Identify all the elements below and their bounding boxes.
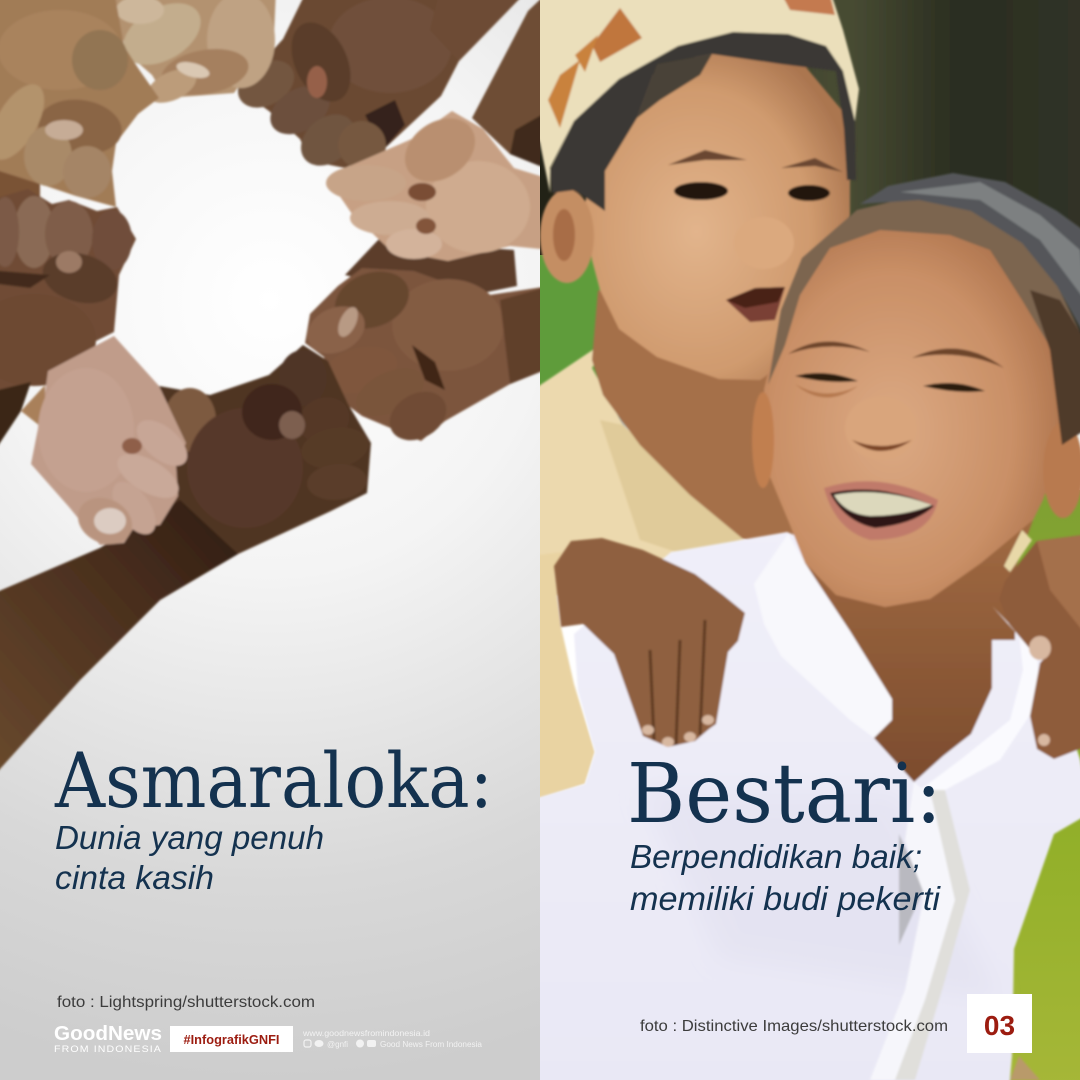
social links: www.goodnewsfromindonesia.id: [302, 1029, 430, 1038]
photo credit left: foto : Lightspring/shutterstock.com: [57, 994, 315, 1011]
photo background: green grass right: [1000, 490, 1080, 1080]
ear left: [752, 392, 774, 488]
fist: lower light: [21, 336, 195, 553]
nose: [778, 225, 793, 264]
logo: GoodNews from Indonesia: FROM INDONESIA: [54, 1044, 162, 1055]
subtitle: Asmaraloka: cinta kasih: [55, 859, 214, 896]
gray gap: [899, 834, 923, 945]
cap: [860, 173, 1080, 345]
title: Bestari: Bestari:: [627, 747, 942, 842]
logo: GoodNews from Indonesia: [54, 1023, 162, 1055]
ear: [540, 189, 594, 283]
subtitle: Bestari: Berpendidikan baik;: [630, 838, 922, 875]
eye shade: [795, 384, 858, 398]
brows: [668, 150, 747, 165]
photo credit right: foto : Distinctive Images/shutterstock.com: [640, 1018, 948, 1035]
subtitle: Bestari: memiliki budi pekerti: [630, 880, 942, 917]
shirt shadows: [640, 790, 1000, 1000]
photo background: dark foliage: [480, 0, 1080, 420]
photo: circle of fists: [0, 0, 550, 780]
fist: top left tan: [0, 0, 159, 207]
cap: [530, 0, 859, 193]
fist: right light: [326, 105, 550, 300]
social links: [302, 1029, 483, 1049]
icon: twitter: [314, 1040, 324, 1047]
boy in front: [530, 173, 1080, 1080]
subtitle: Asmaraloka: Dunia yang penuh: [55, 819, 324, 856]
fist: left dark: [0, 189, 136, 393]
eyes: [674, 182, 728, 200]
clothing: [540, 349, 744, 596]
collar: [754, 534, 892, 738]
boy in back: [530, 0, 859, 802]
fist: top tan: [113, 0, 276, 110]
back boy left hand: [554, 538, 745, 747]
eyes: [795, 373, 858, 382]
gap: brown wrist behind left fists: [0, 160, 40, 210]
fist: top dark with arm: [230, 0, 528, 176]
cream shoulder patch: [1004, 530, 1032, 572]
panel: Bestari photo: [480, 0, 1080, 1080]
photo background: green grass left: [540, 255, 602, 387]
placket and right collar: [920, 606, 1040, 790]
panel background: [0, 0, 540, 1080]
subtitle: Bestari: [630, 838, 942, 917]
mouth: [824, 481, 938, 540]
subtitle: Asmaraloka: [55, 819, 324, 896]
mouth: [726, 287, 785, 322]
logo: GoodNews from Indonesia: GoodNews: [54, 1023, 162, 1045]
fist: lower dark with arm: [0, 345, 372, 780]
fist: right dark with arm: [304, 268, 540, 442]
social links: Good News From Indonesia: [380, 1040, 483, 1049]
page number badge: 03: [984, 1010, 1015, 1041]
hair: [768, 195, 1080, 440]
hair: [550, 32, 856, 211]
shirt: [530, 532, 1080, 1080]
shirt button strip: [871, 785, 954, 1080]
panel: Asmaraloka: [0, 0, 550, 1080]
sleeve: [530, 552, 595, 802]
head: [764, 214, 1068, 607]
title: Asmaraloka: Asmaraloka:: [54, 736, 493, 825]
arm: dark tail at left: [0, 382, 32, 446]
neck: [592, 290, 800, 560]
bottom tan: [1010, 1056, 1040, 1080]
back boy right hand: [999, 534, 1080, 759]
head: [585, 50, 850, 380]
neck: [805, 520, 1033, 782]
ear right: [1043, 422, 1080, 518]
icon: youtube: [367, 1040, 376, 1047]
hashtag badge: #InfografikGNFI: [184, 1032, 280, 1047]
lace trim: [895, 790, 970, 1080]
nose: [845, 396, 917, 460]
social links: @gnfi: [327, 1040, 348, 1049]
hashtag badge: [170, 1026, 293, 1052]
fist: upper right arm: [470, 0, 540, 168]
icon: instagram: [304, 1040, 311, 1047]
brows: [788, 341, 870, 354]
icon: facebook: [356, 1040, 364, 1048]
page number badge: [967, 994, 1032, 1053]
